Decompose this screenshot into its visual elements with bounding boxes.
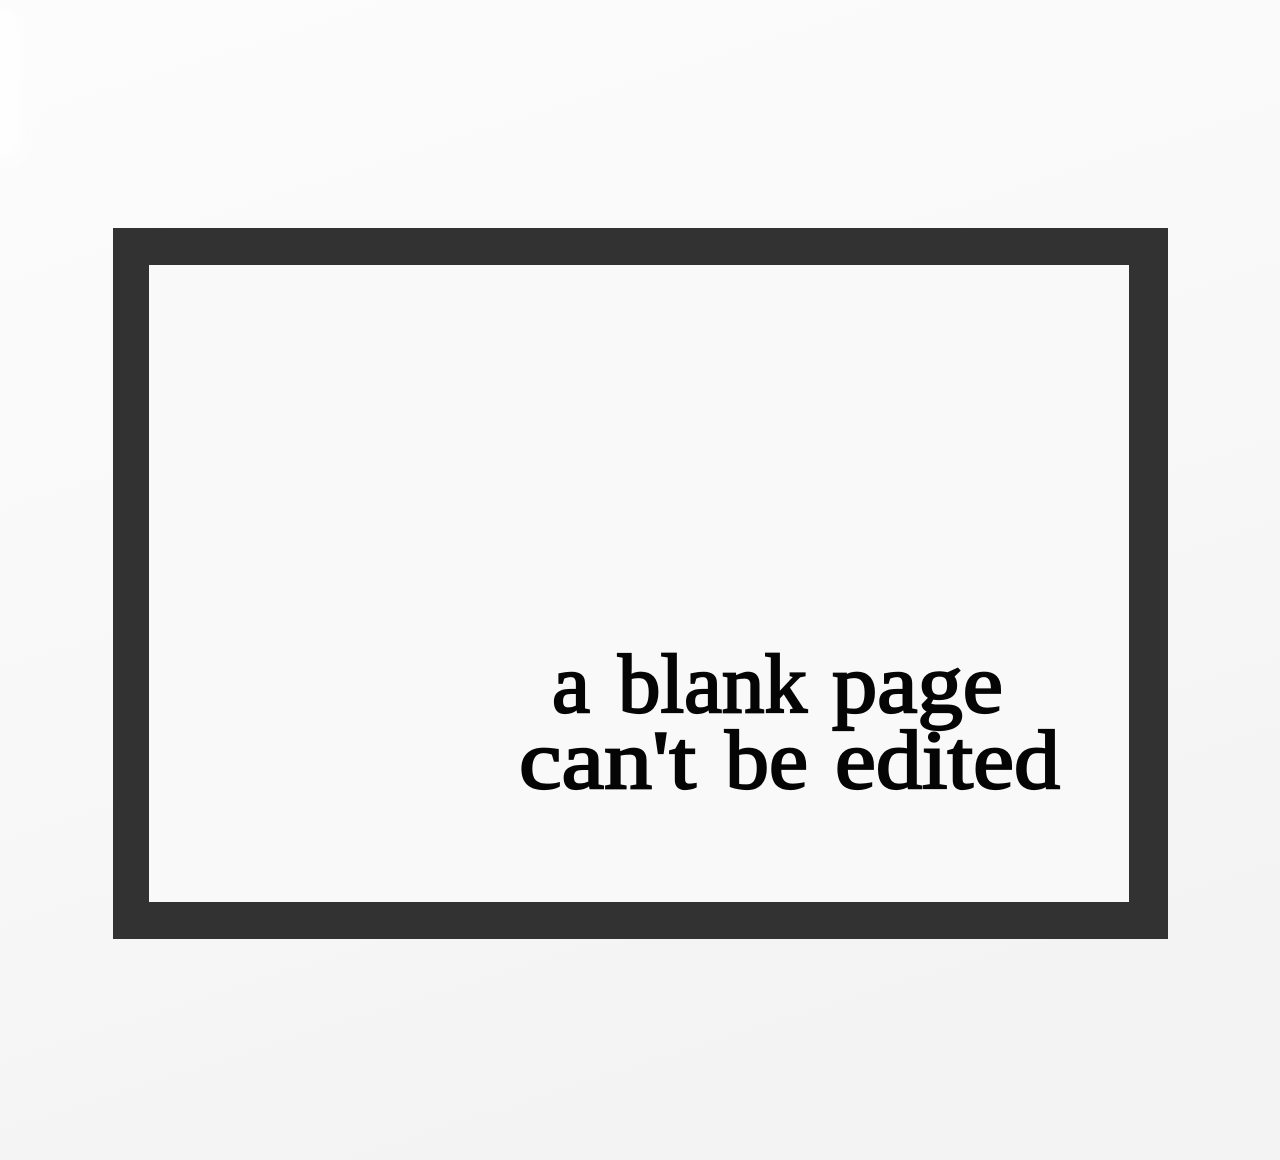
caption line 2: edited [835,714,1060,807]
caption line 1 [552,638,1003,731]
caption line 1: a [552,638,590,731]
caption line 2 [519,714,1060,807]
caption line 1: page [832,638,1003,731]
caption line 2: can't [519,714,696,807]
white glow at left edge [0,10,22,160]
frame interior [149,265,1129,902]
thick dark frame [113,228,1168,939]
caption line 1: blank [618,638,807,731]
caption line 2: be [725,714,808,807]
